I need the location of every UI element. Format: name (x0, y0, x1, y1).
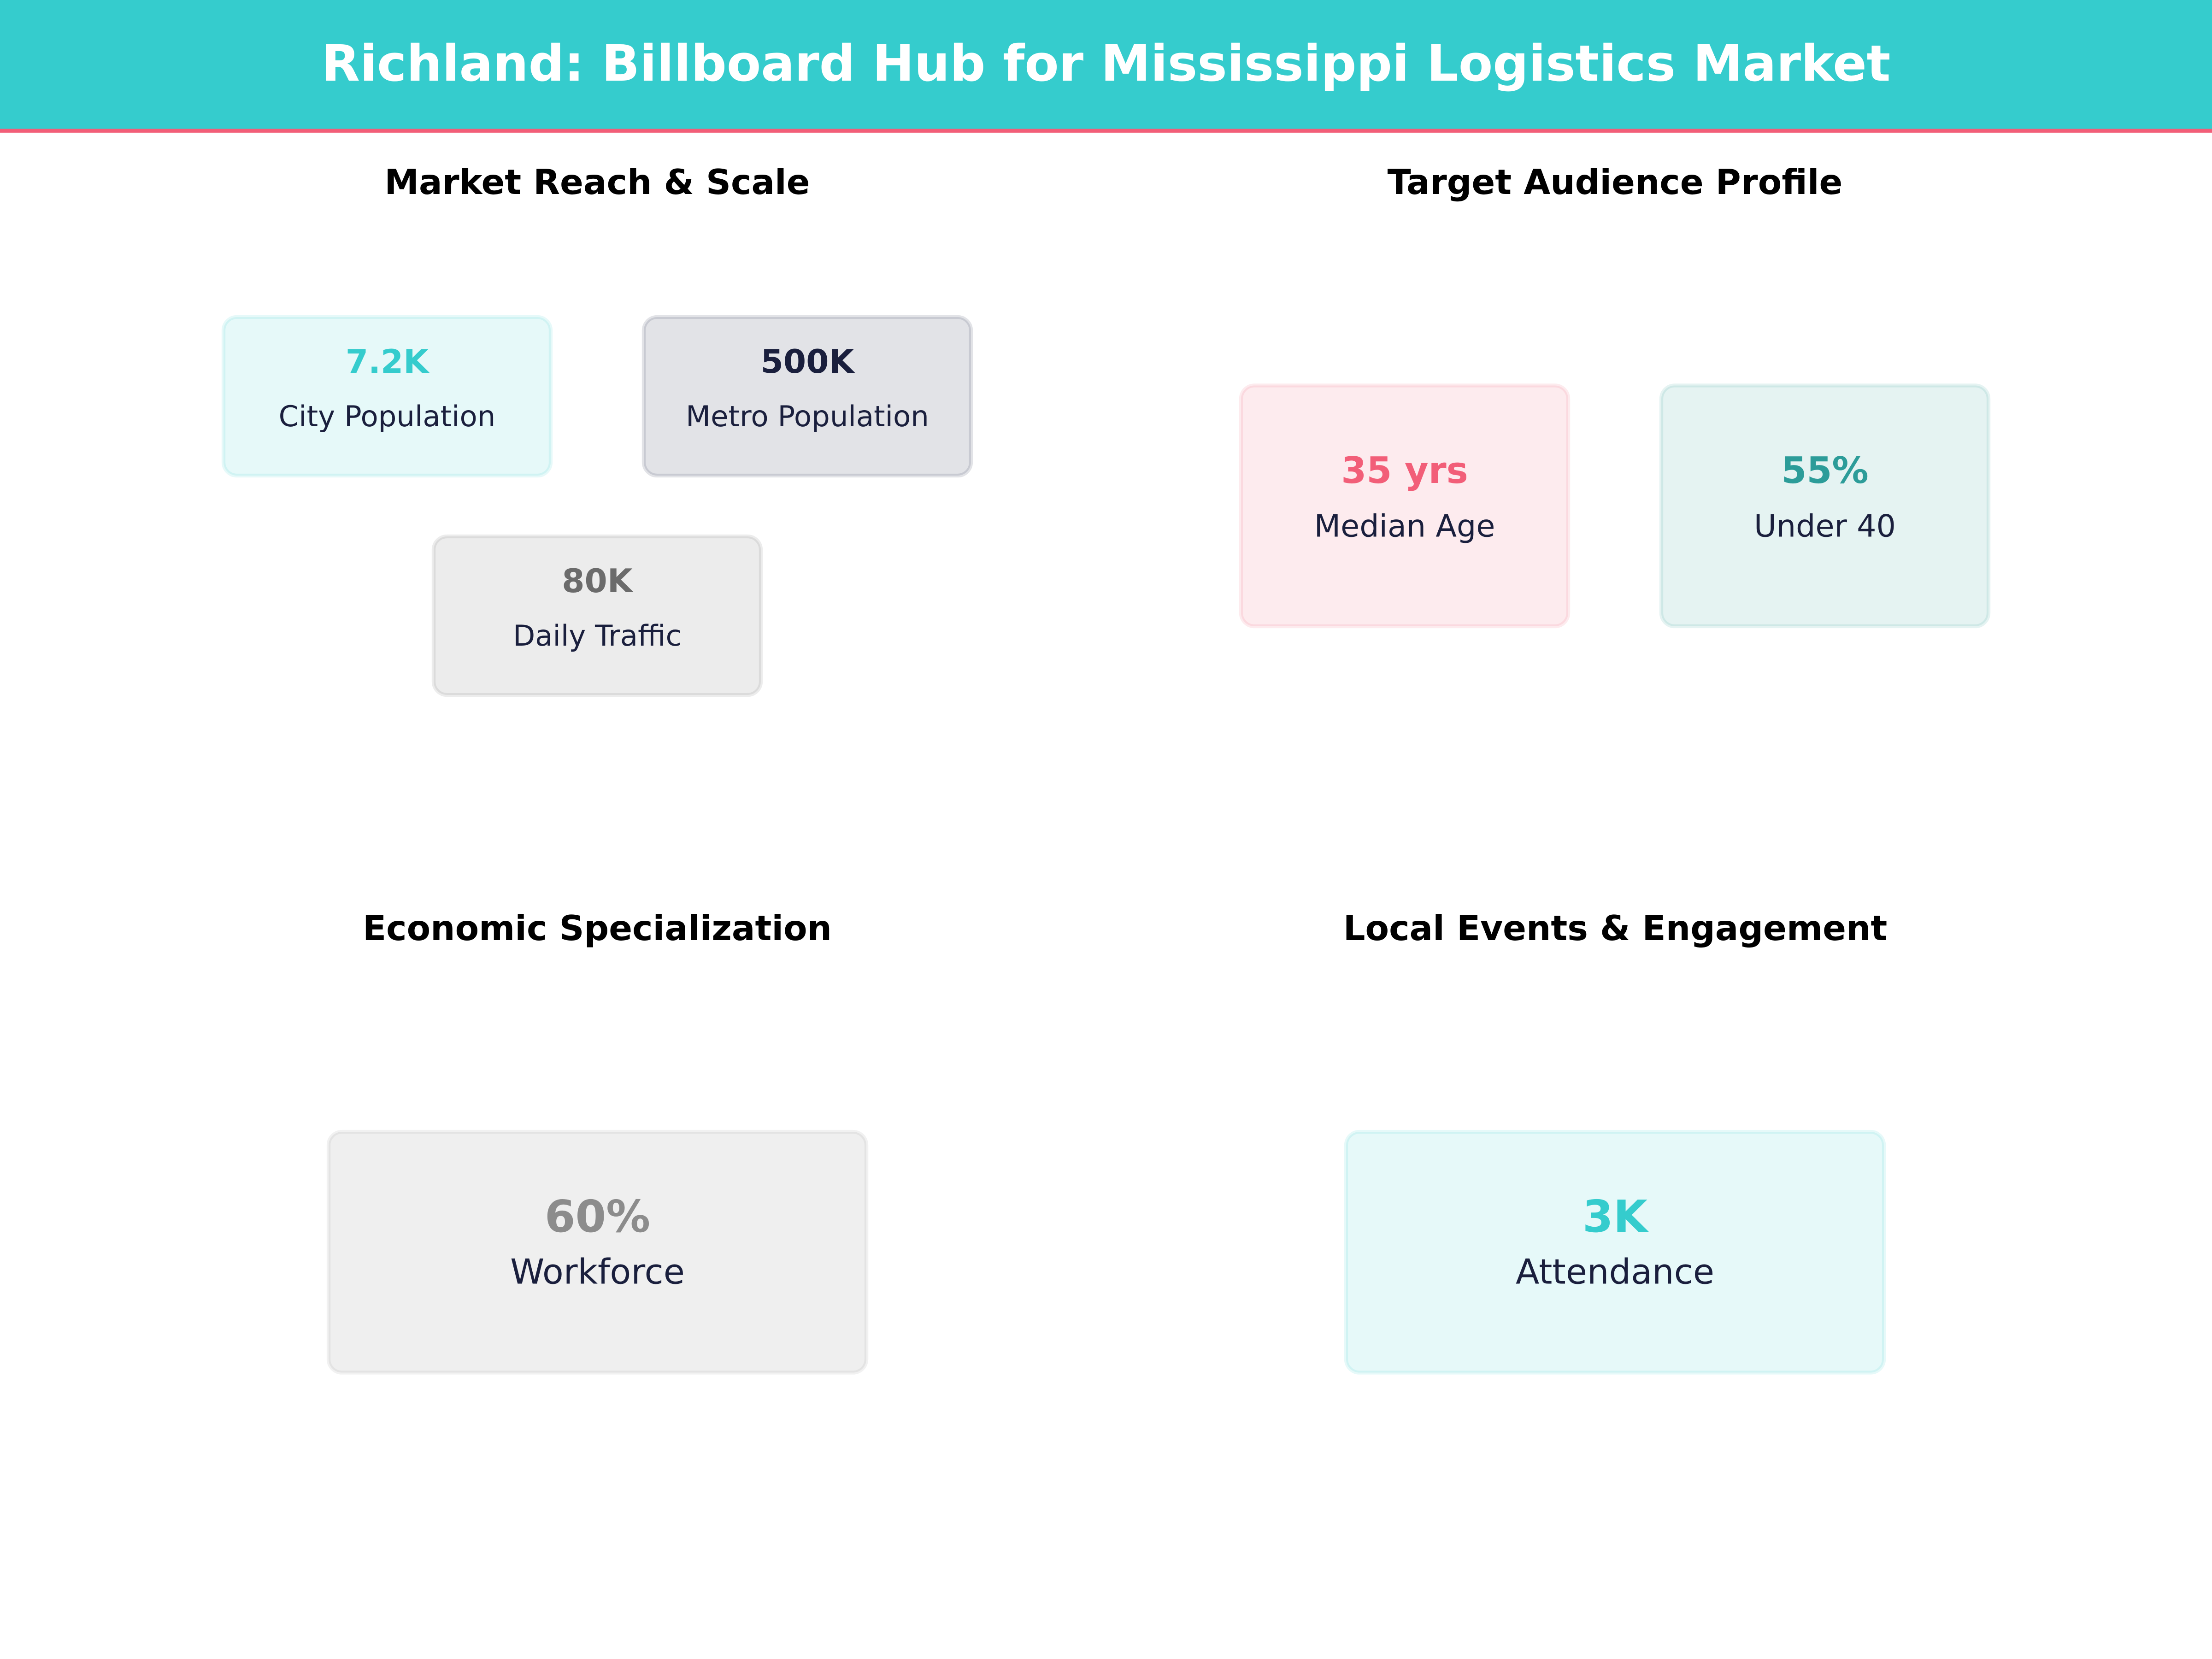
heading: local events and engagement: Local Events & Engagement (1343, 908, 1887, 948)
card: city population: City Population (279, 400, 495, 433)
header background with accent line (0, 0, 2212, 131)
card: median age (1241, 385, 1568, 626)
card: daily traffic (434, 536, 761, 695)
panel: local events and engagement (1343, 908, 1887, 1372)
card: city population: 7.2K (346, 342, 429, 381)
panel: target audience profile (1241, 162, 1988, 626)
card: under 40: Under 40 (1754, 508, 1896, 544)
card: attendance: 3K (1583, 1191, 1649, 1242)
heading: market reach and scale: Market Reach & Scale (384, 162, 810, 202)
card: attendance: Attendance (1516, 1252, 1714, 1292)
card: city population (224, 317, 551, 476)
card: median age: Median Age (1314, 508, 1495, 544)
card: under 40: 55% (1781, 449, 1869, 492)
heading: target audience profile: Target Audience Profile (1388, 162, 1842, 202)
panel: market reach and scale (224, 162, 971, 695)
card: attendance (1346, 1132, 1884, 1372)
panel: economic specialization (329, 908, 866, 1372)
card: metro population: 500K (761, 342, 855, 381)
card: under 40 (1661, 385, 1988, 626)
card: metro population (644, 317, 971, 476)
card: metro population: Metro Population (686, 400, 929, 433)
header banner (0, 0, 2212, 131)
card: workforce: 60% (545, 1191, 650, 1242)
card: workforce: Workforce (510, 1252, 685, 1292)
card: median age: 35 yrs (1341, 449, 1468, 492)
title: Richland: Billboard Hub for Mississippi Logistics Market (322, 34, 1890, 93)
card: daily traffic: Daily Traffic (513, 619, 682, 653)
heading: economic specialization: Economic Specialization (363, 908, 832, 948)
card: daily traffic: 80K (562, 562, 634, 600)
card: workforce (329, 1132, 866, 1372)
